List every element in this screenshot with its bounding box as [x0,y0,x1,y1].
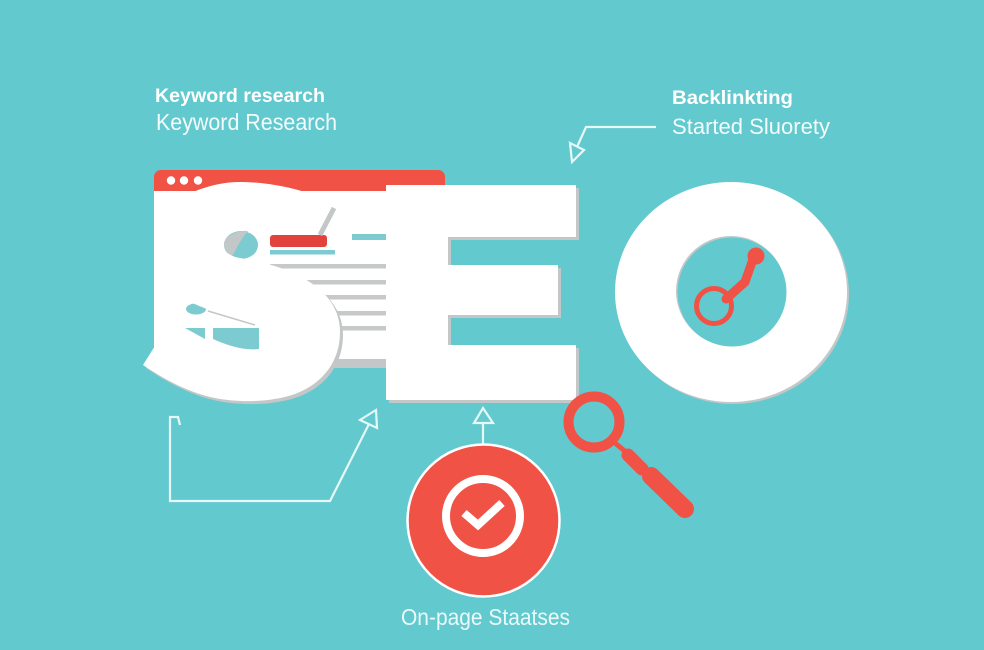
heading: backlinking: Started Sluorety [672,114,830,139]
infographic canvas [143,88,849,630]
icon: magnifying glass [568,396,685,509]
letter E [386,185,579,403]
letter O [615,182,849,404]
arrow: backlinking to SEO [570,127,656,162]
heading: keyword research [155,86,337,135]
heading: backlinking: Backlinkting [672,88,793,109]
heading: keyword research: Keyword research [155,86,325,107]
panel: browser window [154,170,445,368]
arrow: connector from bottom left to S [170,410,377,501]
heading: keyword research: Keyword Research [156,109,337,135]
icon: on-page check badge [408,444,560,596]
label: on-page statuses: On-page Staatses [401,604,570,630]
icon: link inside O [696,248,764,324]
letter S [143,182,343,404]
heading: backlinking [672,88,830,139]
arrow: on-page up to E [474,408,493,444]
